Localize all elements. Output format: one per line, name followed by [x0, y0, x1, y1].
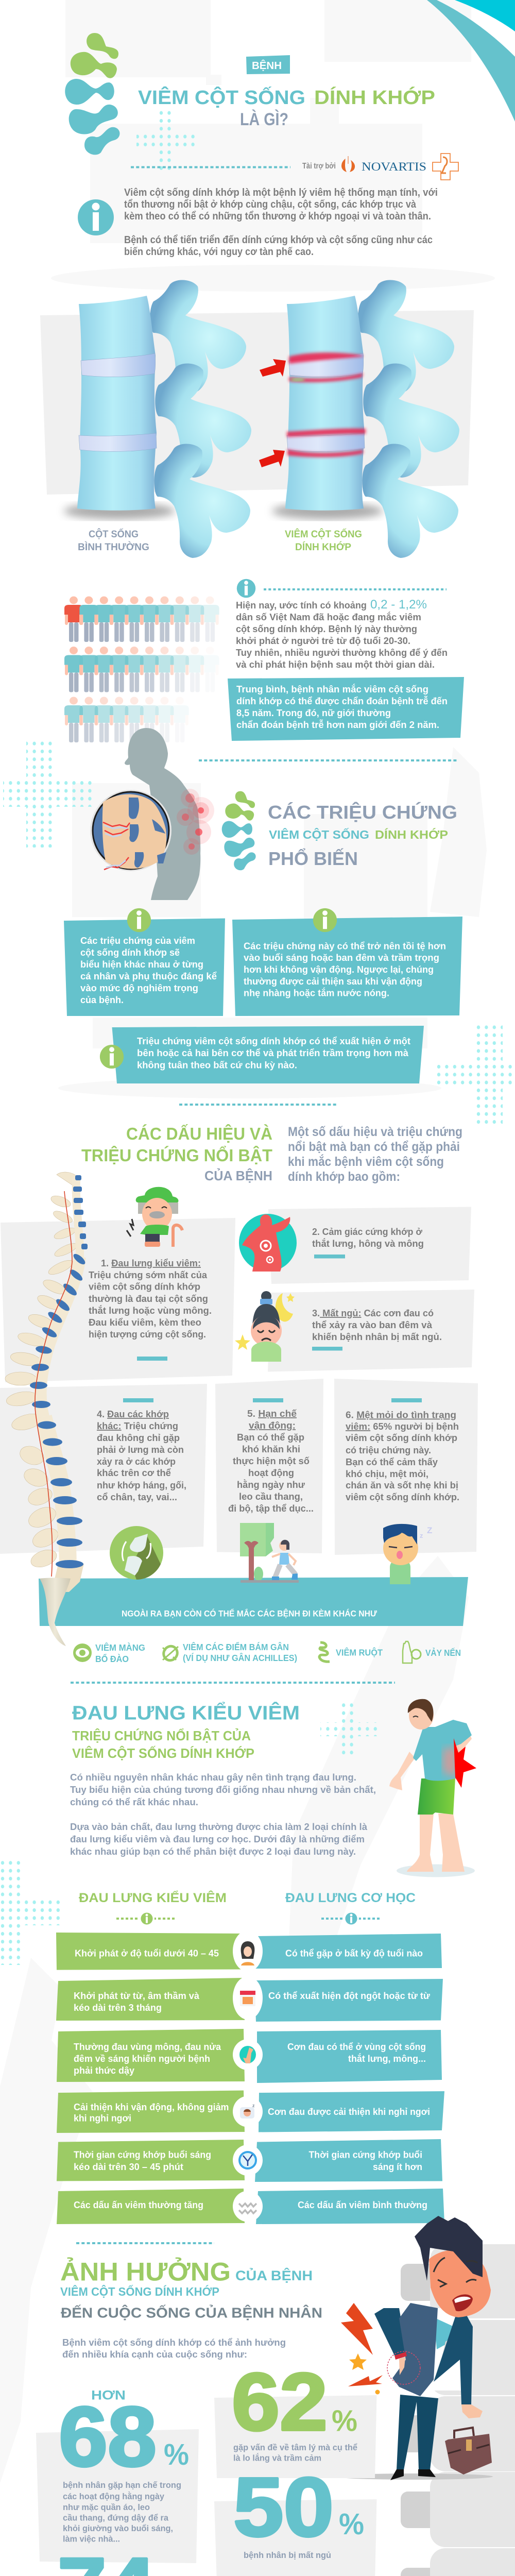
marker bar — [312, 1347, 342, 1351]
icon: woman with insomnia — [235, 1291, 295, 1362]
row 1: Có thể gặp ở bất kỳ độ tuổi nào — [285, 1947, 423, 1959]
panel: symptoms vary: vào mức độ nghiêm trọng — [80, 982, 198, 993]
text: symptom 1: 1. Đau lưng kiểu viêm: — [101, 1258, 201, 1268]
text: impact intro — [62, 2337, 286, 2360]
row 5: Thời gian cứng khớp buổi sáng — [74, 2149, 211, 2160]
panel: symptoms vary — [64, 908, 225, 1016]
intro text — [124, 187, 438, 258]
dotted medical cross — [436, 1022, 515, 1128]
sponsor row — [131, 154, 458, 180]
panel: symptoms vary: cá nhân và phụ thuộc đáng kể — [80, 971, 217, 981]
chart: pictogram of people — [64, 597, 219, 742]
panel: symptoms vary: biểu hiện khác nhau ở từng — [80, 959, 203, 970]
callout: diagnosis delay: Trung bình, bệnh nhân mắc viêm cột sống — [236, 684, 428, 694]
heading: signs and symptoms — [81, 1124, 272, 1183]
info icon — [78, 199, 114, 235]
title: DÍNH KHỚP — [314, 86, 435, 109]
stat: 62%: gặp vấn đề về tâm lý mà cụ thể — [233, 2443, 358, 2452]
heading: signs and symptoms: CỦA BỆNH — [204, 1167, 272, 1183]
text: symptom 5: 5. Hạn chế — [247, 1408, 297, 1419]
icon: tired boy: Z — [427, 1526, 432, 1535]
labels: inflamed spine: VIÊM CỘT SỐNG — [285, 529, 362, 540]
text: symptom 1: Đau kiểu viêm, kèm theo — [89, 1317, 201, 1328]
row 5: Thời gian cứng khớp buổi — [309, 2149, 422, 2160]
panel: symptoms vary: Các triệu chứng của viêm — [80, 935, 195, 946]
text: symptom 5: đi bộ, tập thể dục... — [228, 1503, 314, 1514]
row 1: Khởi phát ở độ tuổi dưới 40 – 45 — [75, 1947, 219, 1959]
title — [138, 86, 435, 129]
prevalence text: khởi phát ở người trẻ từ độ tuổi 20-30. — [236, 635, 410, 646]
band: other conditions — [39, 1577, 468, 1626]
column header: inflammatory: ĐAU LƯNG KIỂU VIÊM — [79, 1890, 227, 1905]
row 4: Cơn đau được cải thiện khi nghỉ ngơi — [268, 2106, 430, 2117]
text: symptom 1: Triệu chứng sớm nhất của — [89, 1269, 208, 1280]
marker bar — [123, 1398, 153, 1402]
text: back pain intro: Dựa vào bản chất, đau lưng thường được chia làm 2 loại chính là — [70, 1821, 368, 1832]
callout: diagnosis delay: dính khớp có thể được chẩn đoán bệnh trễ đến — [236, 696, 448, 706]
text: symptom 6: khó chịu, mệt mỏi, — [346, 1468, 428, 1479]
heading: impact: VIÊM CỘT SỐNG DÍNH KHỚP — [60, 2284, 219, 2298]
text: back pain intro: Tuy biểu hiện của chúng tương đối giống nhau nhưng về bản chất, — [70, 1784, 376, 1795]
text: symptom 5: thực hiện một số — [233, 1455, 310, 1466]
text: back pain intro: Có nhiều nguyên nhân khác nhau gây nên tình trạng đau lưng. — [70, 1772, 356, 1783]
stat: 62%: % — [332, 2404, 357, 2438]
text: symptom 5 — [228, 1408, 314, 1514]
panel: symptoms worsen: nhẹ nhàng hoặc tắm nước nóng. — [244, 987, 389, 998]
panel: symptom progression: Triệu chứng viêm cột sống dính khớp có thể xuất hiện ở một — [137, 1036, 410, 1046]
prevalence text: và chỉ phát hiện bệnh sau một thời gian dài. — [236, 659, 435, 670]
comorbidity: enteritis: VIÊM RUỘT — [336, 1647, 383, 1658]
intro text: tổn thương nổi bật ở khớp cùng chậu, cột sống, các khớp trục và — [124, 199, 417, 210]
heading: symptoms: PHỔ BIẾN — [268, 847, 358, 869]
stat: 68%: các hoạt động hằng ngày — [63, 2492, 165, 2501]
marker bar — [137, 1357, 167, 1361]
prevalence text: cột sống dính khớp. Bệnh lý này thường — [236, 623, 417, 634]
comorbidity: enteritis — [319, 1642, 383, 1662]
column header: mechanical: ĐAU LƯNG CƠ HỌC — [285, 1891, 416, 1905]
heading: impact: CỦA BỆNH — [235, 2267, 313, 2283]
stat: 68%: 68 — [59, 2389, 157, 2484]
prevalence text — [236, 598, 448, 670]
text: signs intro: Một số dấu hiệu và triệu chứng — [288, 1125, 462, 1139]
sponsor row: Tài trợ bởi — [302, 162, 336, 171]
text: symptom 1 — [89, 1258, 212, 1340]
arrow: lower inflammation — [259, 450, 285, 467]
row 2 — [56, 1976, 443, 2022]
panel: symptoms vary: cột sống dính khớp sẽ — [80, 947, 180, 958]
panel: symptom progression — [100, 1026, 424, 1083]
stat: 68%: làm việc nhà... — [63, 2534, 120, 2544]
text: symptom 1: thường là đau tại cột sống — [89, 1293, 208, 1304]
panel: symptoms worsen: vào buổi sáng hoặc ban đêm và trầm trọng — [244, 952, 439, 963]
dotted rule — [199, 759, 458, 761]
text: symptom 5: leo cầu thang, — [239, 1491, 303, 1502]
text: symptom 6: viêm cột sống dính khớp — [346, 1432, 457, 1443]
text: symptom 2: 2. Cảm giác cứng khớp ở — [312, 1226, 423, 1237]
icon: tired boy — [383, 1524, 432, 1584]
text: symptom 3: thể xảy ra vào ban đêm và — [312, 1319, 433, 1330]
column header: mechanical — [285, 1891, 416, 1926]
row 5 — [57, 2139, 442, 2182]
panel: symptom 4 box — [0, 1384, 207, 1554]
heading: impact: ĐẾN CUỘC SỐNG CỦA BỆNH NHÂN — [61, 2304, 322, 2320]
info icon with dotted rule — [237, 579, 447, 598]
icon: elderly man with cane — [127, 1187, 182, 1247]
row 6: Các dấu ấn viêm bình thường — [298, 2199, 427, 2210]
text: symptom 4: đau không chỉ gặp — [97, 1432, 180, 1443]
text: symptom 4: 4. Đau các khớp — [97, 1409, 169, 1419]
text: symptom 4: khác trên cơ thể — [97, 1467, 171, 1478]
panel: symptoms worsen: thường được cải thiện sau khi vận động — [244, 976, 422, 987]
tag: BỆNH — [246, 55, 290, 74]
column header: inflammatory — [79, 1890, 227, 1926]
text: symptom 5: Bạn có thể gặp — [237, 1432, 304, 1443]
text: symptom 4 — [97, 1409, 186, 1502]
callout: diagnosis delay: 8,5 năm. Trong đó, nữ giới thường — [236, 707, 391, 718]
labels: normal spine: BÌNH THƯỜNG — [78, 541, 149, 553]
text: symptom 3: 3. Mất ngủ: Các cơn đau có — [312, 1308, 434, 1318]
row 2: Có thể xuất hiện đột ngột hoặc từ từ — [268, 1990, 431, 2001]
title: VIÊM CỘT SỐNG — [138, 86, 305, 109]
dotted rule — [71, 1682, 395, 1684]
text: symptom 6: 6. Mệt mỏi do tình trạng — [346, 1410, 456, 1420]
text: impact intro: đến nhiều khía cạnh của cuộc sống như: — [62, 2349, 247, 2360]
illustration: man holding lower back — [389, 1699, 476, 1877]
comorbidity: uveitis — [73, 1642, 145, 1664]
intro text: Viêm cột sống dính khớp là một bệnh lý viêm hệ thống mạn tính, với — [124, 187, 438, 198]
row 6: Các dấu ấn viêm thường tăng — [74, 2199, 203, 2210]
dotted medical cross — [136, 111, 196, 170]
icon: body with back pain — [239, 1214, 297, 1272]
dotted rule — [179, 1104, 337, 1106]
illustration: silhouette with spine inset — [90, 728, 214, 900]
dotted rule — [76, 2242, 214, 2244]
heading: symptoms: VIÊM CỘT SỐNG — [269, 827, 369, 841]
row 5: kéo dài trên 30 – 45 phút — [74, 2161, 183, 2172]
panel: symptoms vary: của bệnh. — [80, 994, 124, 1005]
panel: symptoms worsen — [232, 908, 462, 1016]
background: grey vertebrae stack — [401, 2244, 515, 2576]
text: symptom 3: khiến bệnh nhân bị mất ngủ. — [312, 1331, 442, 1342]
heading: symptoms: DÍNH KHỚP — [375, 827, 448, 841]
heading: inflammatory back pain: VIÊM CỘT SỐNG DÍNH KHỚP — [72, 1745, 254, 1761]
illustration: normal spine — [64, 280, 251, 558]
comorbidity: uveitis: BỔ ĐÀO — [95, 1653, 129, 1664]
heading: symptoms — [268, 801, 457, 869]
text: symptom 6: chán ăn và sốt nhẹ khi bị — [346, 1480, 458, 1490]
text: signs intro — [288, 1125, 462, 1184]
row 4 — [57, 2091, 444, 2133]
labels: normal spine: CỘT SỐNG — [89, 529, 139, 540]
panel: symptom 5 box — [215, 1379, 323, 1553]
marker bar — [391, 1398, 422, 1402]
heading: symptoms: CÁC TRIỆU CHỨNG — [268, 801, 457, 823]
heading: inflammatory back pain: TRIỆU CHỨNG NỔI BẬT CỦA — [72, 1727, 251, 1743]
row 4: khi nghỉ ngơi — [74, 2112, 131, 2124]
stat: 68% — [36, 2388, 199, 2563]
icon: tired boy: z — [420, 1532, 423, 1539]
text: symptom 3 — [312, 1308, 442, 1342]
stat: 68%: như mặc quần áo, leo — [63, 2502, 150, 2512]
sponsor row: NOVARTIS — [362, 160, 426, 173]
illustration: exhausted businessman — [335, 2216, 493, 2480]
stat: 68%: bệnh nhân gặp hạn chế trong — [63, 2480, 181, 2490]
text: symptom 2: thắt lưng, hông và mông — [312, 1238, 424, 1249]
labels: inflamed spine: DÍNH KHỚP — [295, 541, 351, 553]
row 3: Thường đau vùng mông, đau nửa — [74, 2041, 221, 2052]
stat: 62% — [214, 2357, 377, 2478]
row 3 — [57, 2029, 442, 2083]
comorbidity: enthesitis: VIÊM CÁC ĐIỂM BÁM GÂN — [183, 1641, 289, 1652]
text: impact intro: Bệnh viêm cột sống dính khớp có thể ảnh hưởng — [62, 2337, 286, 2348]
text: symptom 2 — [312, 1226, 424, 1249]
text: symptom 6: Bạn có thể cảm thấy — [346, 1456, 438, 1467]
text: symptom 5: hằng ngày như — [237, 1479, 305, 1490]
text: symptom 4: khác: Triệu chứng — [97, 1420, 178, 1431]
row 3: Cơn đau có thể ở vùng cột sống — [287, 2041, 426, 2052]
labels: normal spine — [78, 529, 149, 553]
panel: spine comparison background — [40, 310, 474, 495]
dotted medical cross — [320, 1700, 377, 1758]
text: back pain intro: chúng có thể rất khác nhau. — [70, 1797, 198, 1807]
heading: inflammatory back pain: ĐAU LƯNG KIỂU VIÊM — [72, 1701, 300, 1724]
intro text: Bệnh có thể tiến triển đến dính cứng khớp và cột sống cũng như các — [124, 234, 433, 246]
intro text: kèm theo có thể có những tổn thương ở khớp ngoại vi và toàn thân. — [124, 211, 431, 222]
stat: 68%: cầu thang, đứng dậy để ra — [63, 2513, 169, 2522]
panel: symptom progression: bên hoặc cả hai bên cơ thể và phát triển trầm trọng hơn mà — [137, 1047, 409, 1058]
panel: symptoms worsen: Các triệu chứng này có thể trở nên tồi tệ hơn — [244, 941, 446, 951]
title: LÀ GÌ? — [240, 110, 288, 129]
stat: 68%: % — [164, 2438, 189, 2471]
labels: inflamed spine — [285, 529, 362, 553]
row 3: phải thức dậy — [74, 2065, 135, 2076]
row 1 — [56, 1930, 442, 1972]
panel: symptom 1 box — [1, 1218, 235, 1382]
comorbidity: psoriasis: VẢY NẾN — [425, 1647, 461, 1658]
comorbidity: uveitis: VIÊM MÀNG — [95, 1642, 145, 1653]
prevalence text: Tuy nhiên, nhiều người thường không để ý đến — [236, 647, 448, 658]
panel: symptoms worsen: hơn khi không vận động. Ngược lại, chúng — [244, 964, 434, 975]
row 3: thắt lưng, mông... — [348, 2053, 426, 2064]
prevalence text: dân số Việt Nam đã hoặc đang mắc viêm — [236, 612, 421, 622]
text: symptom 6: có triệu chứng này. — [346, 1445, 431, 1455]
text: back pain intro — [70, 1772, 376, 1857]
marker bar — [314, 1255, 345, 1258]
comorbidity: psoriasis — [403, 1641, 461, 1663]
row 2: Khởi phát từ từ, âm thầm và — [74, 1990, 200, 2001]
panel: symptom 3 box — [268, 1290, 474, 1371]
stat: 50%: 50 — [233, 2461, 334, 2554]
dotted medical cross — [3, 741, 94, 848]
text: symptom 5: hoạt động — [248, 1467, 294, 1478]
illustration: inflamed spine — [272, 280, 459, 558]
row 6 — [57, 2189, 444, 2224]
heading: signs and symptoms: TRIỆU CHỨNG NỔI BẬT — [81, 1146, 272, 1165]
heading: inflammatory back pain — [72, 1701, 300, 1761]
stat: 50%: % — [339, 2507, 364, 2541]
row 3: đêm về sáng khiến người bệnh — [74, 2053, 210, 2064]
arrow: upper inflammation — [260, 359, 286, 377]
text: symptom 4: như khớp háng, gối, — [97, 1480, 186, 1490]
prevalence text: Hiện nay, ước tính có khoảng — [236, 600, 367, 611]
text: symptom 1: hiện tượng cứng cột sống. — [89, 1329, 206, 1340]
intro text: biến chứng khác, với nguy cơ tàn phế cao. — [124, 246, 314, 258]
text: symptom 4: phải ở lưng mà còn — [97, 1444, 184, 1455]
text: back pain intro: khác nhau giúp bạn có thể phân biệt được 2 loại đau lưng này. — [70, 1846, 356, 1857]
text: symptom 1: thắt lưng hoặc vùng mông. — [89, 1305, 212, 1316]
callout: diagnosis delay — [228, 677, 464, 741]
text: signs intro: khi mắc bệnh viêm cột sống — [288, 1154, 444, 1169]
text: back pain intro: đau lưng kiểu viêm và đau lưng cơ học. Dưới đây là những điểm — [70, 1834, 365, 1844]
illustration: full human spine — [5, 1172, 88, 1646]
heading: impact — [60, 2257, 322, 2320]
comorbidity: enthesitis — [161, 1641, 297, 1663]
text: symptom 6 — [346, 1410, 459, 1502]
text: symptom 5: vận động: — [249, 1420, 296, 1431]
text: symptom 4: cổ chân, tay, vai... — [97, 1492, 177, 1502]
blob logo mark — [65, 33, 119, 155]
row 2: kéo dài trên 3 tháng — [74, 2002, 162, 2013]
icon: person running by tree — [240, 1523, 299, 1583]
stat: 68%: HƠN — [91, 2388, 126, 2403]
text: signs intro: nổi bật mà bạn có thể gặp phải — [288, 1140, 460, 1154]
dotted medical cross — [0, 1859, 61, 1965]
row 4: Cải thiện khi vận động, không giảm — [74, 2102, 229, 2112]
stat: 68%: khỏi giường vào buổi sáng, — [63, 2523, 173, 2533]
tag: BỆNH: BỆNH — [252, 59, 282, 72]
panel: symptom 2 box — [268, 1207, 471, 1284]
comorbidity: enthesitis: (VÍ DỤ NHƯ GÂN ACHILLES) — [183, 1652, 297, 1663]
text: signs intro: dính khớp bao gồm: — [288, 1170, 400, 1184]
band text: NGOÀI RA BẠN CÒN CÓ THỂ MẮC CÁC BỆNH ĐI KÈM KHÁC NHƯ — [122, 1608, 377, 1619]
stat: 50% — [214, 2461, 377, 2576]
stat: 62%: là lo lắng và trầm cảm — [233, 2453, 321, 2463]
stat: 50%: bệnh nhân bị mất ngủ — [244, 2550, 331, 2560]
text: symptom 4: xảy ra ở các khớp — [97, 1456, 176, 1467]
text: symptom 6: viêm: 65% người bị bệnh — [346, 1421, 459, 1432]
marker bar — [253, 1398, 283, 1402]
text: symptom 5: khó khăn khi — [242, 1444, 300, 1454]
text: symptom 6: viêm cột sống dính khớp. — [346, 1492, 459, 1502]
blob mark — [222, 791, 256, 870]
prevalence text: 0,2 - 1,2% — [370, 598, 427, 612]
heading: signs and symptoms: CÁC DẤU HIỆU VÀ — [126, 1124, 272, 1143]
heading: impact: ẢNH HƯỞNG — [60, 2257, 231, 2286]
row 4: z — [252, 2103, 255, 2108]
panel: symptom 6 box — [334, 1379, 478, 1555]
panel: symptom progression: không tuân theo bất cứ chu kỳ nào. — [137, 1059, 297, 1071]
decorative top-right swooshes — [427, 0, 515, 122]
stat: 62%: 62 — [232, 2357, 328, 2447]
text: symptom 1: viêm cột sống dính khớp — [89, 1281, 200, 1292]
icon: knee joint — [110, 1526, 163, 1580]
callout: diagnosis delay: chẩn đoán bệnh trễ hơn nam giới đến 2 năm. — [236, 719, 439, 730]
row 5: sáng ít hơn — [373, 2161, 422, 2172]
